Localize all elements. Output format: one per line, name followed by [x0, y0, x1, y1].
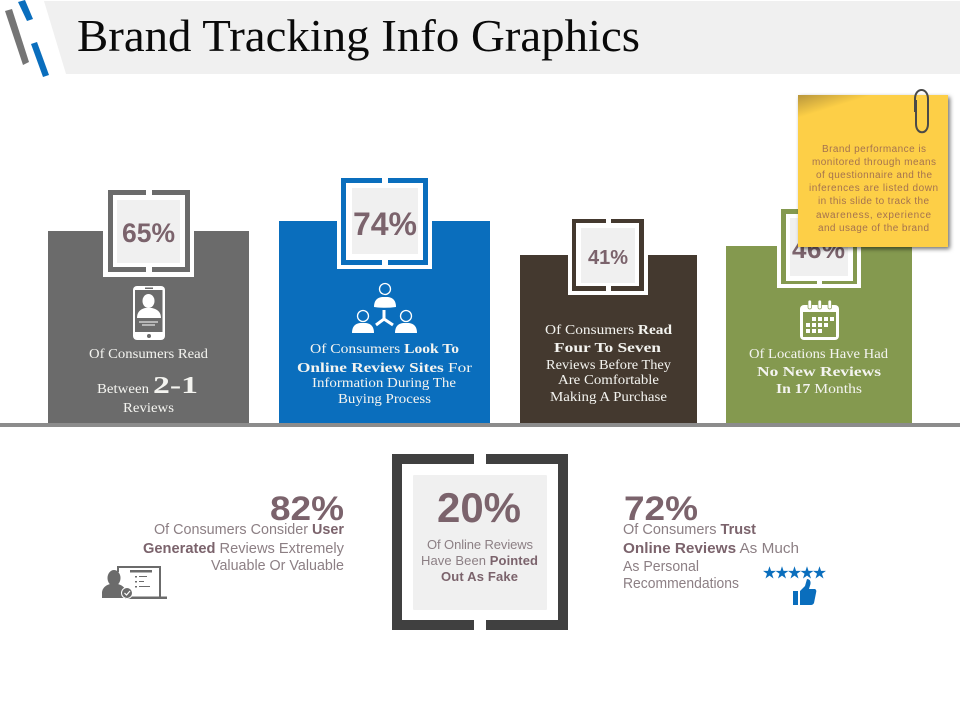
stat frame 74%: 74%: [353, 206, 417, 242]
logo stripes: [5, 0, 49, 77]
baseline rule: [0, 423, 960, 427]
stat frame 65%: [108, 190, 190, 272]
title bar: [44, 1, 960, 74]
text: user generated: Of Consumers Consider User: [154, 522, 344, 538]
panel: 41% four to seven reviews: [520, 216, 697, 423]
icon: five stars: [763, 566, 826, 578]
text: no new reviews in 17 months: Of Locations Have Had: [749, 347, 888, 362]
note text: monitored through means: [812, 157, 936, 168]
icon: calendar: [800, 300, 839, 340]
text: read four to seven reviews: Are Comfortable: [558, 373, 659, 388]
text: of consumers read between 2-1 reviews: Of Consumers Read: [89, 347, 208, 362]
text: look to online review sites: Buying Process: [338, 392, 431, 407]
text: look to online review sites: Of Consumers Look To: [310, 342, 459, 357]
text: trust online reviews: As Personal: [623, 559, 699, 575]
sticky note: [798, 90, 948, 247]
stat frame 65%: 65%: [122, 218, 175, 248]
text: read four to seven reviews: Making A Purchase: [550, 390, 667, 405]
stat frame 41%: [572, 219, 644, 291]
stat: 72% trust online reviews: [623, 490, 826, 605]
text: trust online reviews: Recommendations: [623, 576, 739, 592]
text: read four to seven reviews: Reviews Before They: [546, 358, 671, 373]
text: user generated: Generated Reviews Extremely: [143, 541, 345, 557]
icon: thumbs up: [793, 579, 816, 605]
note text: of questionnaire and the: [816, 170, 932, 181]
text: of consumers read between 2-1 reviews: [89, 347, 208, 416]
text: of consumers read between 2-1 reviews: Reviews: [123, 401, 174, 416]
text: look to online review sites: [297, 342, 472, 407]
text: no new reviews in 17 months: In 17 Months: [776, 382, 862, 397]
text: no new reviews in 17 months: No New Reviews: [757, 365, 882, 380]
stat frame 46%: 46%: [792, 234, 845, 264]
text: trust online reviews: Of Consumers Trust: [623, 522, 756, 538]
stat frame 74%: [341, 178, 428, 265]
text: trust online reviews: [623, 522, 799, 592]
note text: Brand performance is: [822, 144, 926, 155]
note text: in this slide to track the: [818, 196, 929, 207]
stat: 72% trust online reviews: 72%: [624, 490, 698, 528]
text: read four to seven reviews: Four To Seven: [554, 341, 661, 356]
text: user generated: [143, 522, 345, 574]
icon: smartphone profile: [133, 286, 165, 340]
panel: 46% no new reviews: [726, 205, 912, 423]
text: of consumers read between 2-1 reviews: Between: [97, 382, 149, 397]
text: no new reviews in 17 months: [749, 347, 888, 397]
text: trust online reviews: Online Reviews As Much: [623, 541, 799, 557]
text: user generated: Valuable Or Valuable: [211, 558, 344, 574]
note text: and usage of the brand: [818, 223, 929, 234]
note text: [809, 144, 938, 234]
text: pointed out as fake: Out As Fake: [441, 569, 518, 584]
text: pointed out as fake: Have Been Pointed: [421, 553, 538, 568]
stat frame 41%: 41%: [588, 247, 628, 269]
stat: 82% user generated reviews: 82%: [270, 490, 344, 528]
icon: user with laptop: [102, 567, 167, 599]
text: pointed out as fake: [421, 537, 538, 584]
note text: awareness, experience: [816, 210, 931, 221]
title: Brand Tracking Info Graphics: [77, 11, 640, 61]
panel: 65% reviews read: [48, 185, 249, 423]
text: read four to seven reviews: Of Consumers Read: [545, 323, 672, 338]
text: read four to seven reviews: [545, 323, 672, 405]
text: of consumers read between 2-1 reviews: 2-1: [153, 373, 198, 399]
icon: paperclip: [915, 90, 928, 132]
text: look to online review sites: Information During The: [312, 376, 456, 391]
text: pointed out as fake: Of Online Reviews: [427, 537, 534, 552]
center stat frame: 20%: 20%: [437, 484, 521, 531]
stat: 82% user generated reviews: [102, 490, 345, 599]
stat frame 46%: [781, 209, 857, 288]
panel: 74% review sites: [279, 175, 490, 423]
icon: connected people: [352, 284, 417, 333]
text: look to online review sites: Online Review Sites For: [297, 361, 472, 376]
note text: inferences are listed down: [809, 183, 938, 194]
center stat frame: 20%: [392, 454, 568, 630]
